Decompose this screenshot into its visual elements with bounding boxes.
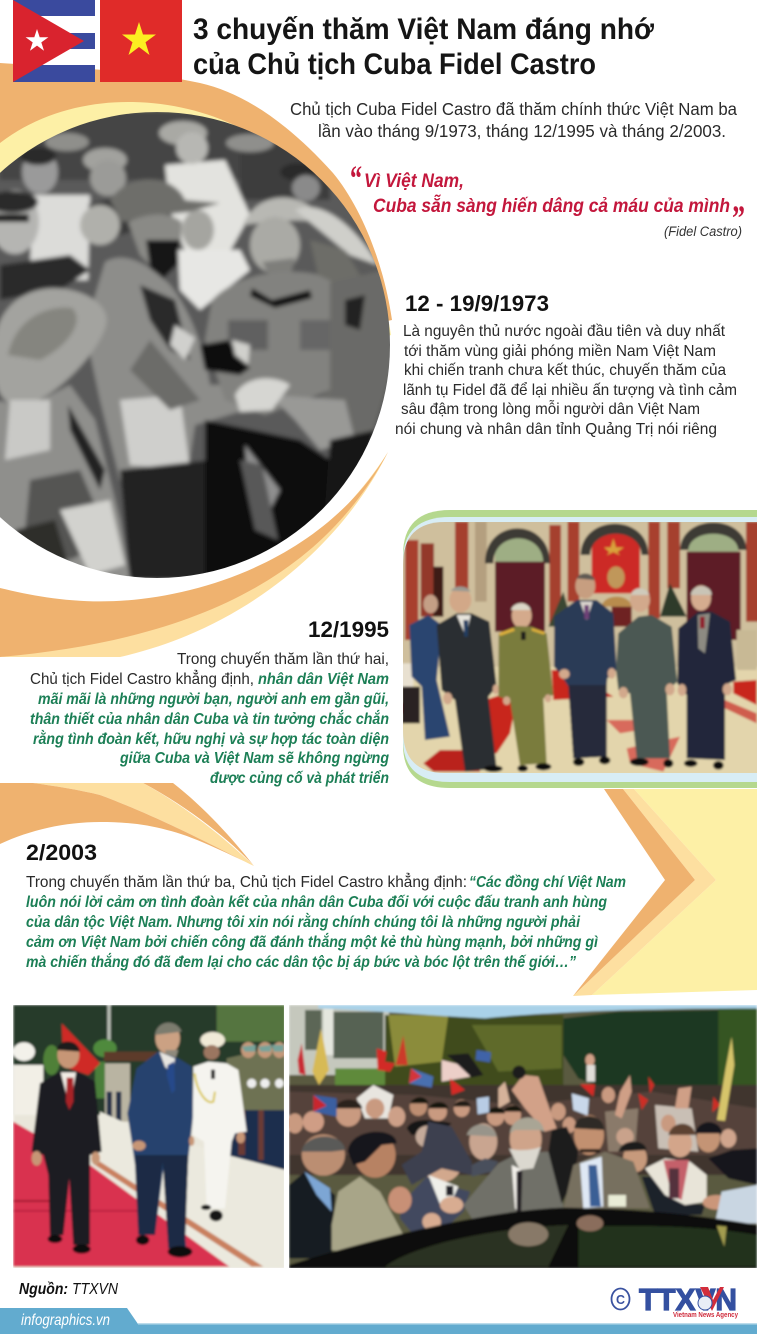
man: far left dark suit [302,1134,345,1176]
text block: 2003 visit: của dân tộc Việt Nam. Nhưng tôi xin nói rằng chính chúng tôi là những người phải [26,912,580,931]
text block: 2003 visit: mà chiến thắng đó đã đem lại cho các dân tộc bị áp bức và bóc lột trên thế giới…” [26,952,576,971]
front helmet [0,288,107,406]
plant [660,583,687,617]
text block: 2003 visit: cảm ơn Việt Nam bởi chiến công đã đánh thắng một kẻ thù hùng mạnh, bởi những gì [26,932,598,951]
red carpet and floor [400,667,757,777]
decorative swoosh: middle orange and yellow curves [0,783,254,866]
man: grey suit white hair [421,1141,462,1182]
text block: 1973 visit: sâu đậm trong lòng mỗi người dân Việt Nam [401,399,700,418]
man glasses left [0,190,39,254]
text block: 1973 visit: tới thăm vùng giải phóng miền Nam Việt Nam [404,343,716,360]
raised hands [512,1075,557,1132]
title: 3 chuyến thăm Việt Nam đáng nhớ [193,13,655,46]
clasped hands [235,378,290,412]
heading: 12/1995: 12/1995 [308,617,389,642]
heading: 12 - 19/9/1973: 12 - 19/9/1973 [405,291,549,316]
footer band [0,1308,757,1334]
icon: copyright: C [616,1292,626,1307]
white shirts [357,1085,393,1118]
intro text: Chủ tịch Cuba Fidel Castro đã thăm chính thức Việt Nam ba [290,99,737,119]
photo: Fidel Castro with soldiers in 1973 [0,110,400,580]
man 5 grey green [630,594,652,612]
flag [62,1023,100,1075]
text block: 1973 visit: khi chiến tranh chưa kết thúc, chuyến thăm của [404,362,726,379]
text block: 2003 visit: Trong chuyến thăm lần thứ ba, Chủ tịch Fidel Castro khẳng định: [26,872,467,891]
man: beige jacket [354,1132,396,1178]
text block: 1995 visit: rằng tình đoàn kết, hữu nghị và sự hợp tác toàn diện [33,729,389,748]
title: của Chủ tịch Cuba Fidel Castro [193,48,596,81]
right soldier helmet and face [243,198,318,225]
columns [405,540,418,640]
decorative chevron: yellow, light orange and orange arrow [573,789,757,996]
icon: globe and red swoosh [698,1287,724,1311]
text block: 1995 visit: giữa Cuba và Việt Nam sẽ không ngừng [119,750,389,767]
Castro cap and head [110,179,220,222]
crowd base [289,1085,757,1175]
agency name: Vietnam News Agency [673,1310,739,1319]
heading: 2/2003: 2/2003 [26,840,97,865]
intro text: lần vào tháng 9/1973, tháng 12/1995 và tháng 2/2003. [318,121,726,141]
text block: 1995 visit: mãi mãi là những người bạn, người anh em gần gũi, [38,691,389,708]
car roof [289,1208,757,1268]
dark hair [335,1100,362,1108]
white jacket man [645,1158,707,1205]
wordmark: TTXVN [639,1282,737,1317]
source credit: Nguồn: TTXVN [19,1281,118,1298]
text block: 1973 visit: lãnh tụ Fidel đã để lại nhiều ấn tượng và tình cảm [403,381,737,399]
man 2 dark suit [449,587,471,613]
man: right of Castro [563,1152,650,1208]
title [193,13,655,81]
far right hat and soldier [295,207,378,265]
photo frame: green and light blue border [395,510,757,788]
man behind Castro [182,210,214,250]
bust [607,566,625,588]
text block: 1973 visit: Là nguyên thủ nước ngoài đầu tiên và duy nhất [403,323,726,340]
photo: Castro waving to the crowd [287,1005,757,1268]
decorative swoosh: lower orange and yellow curves [0,452,388,657]
intro text [290,99,737,141]
text block: 1973 visit [395,323,737,438]
text block: 1973 visit: nói chung và nhân dân tỉnh Quảng Trị nói riêng [395,421,717,438]
man in black suit [57,1042,79,1068]
text block: 2003 visit: luôn nói lời cảm ơn tình đoàn kết của nhân dân Cuba đối với cuộc đấu tranh anh hùng [26,894,607,911]
dark gloved arm [200,340,250,375]
trees [385,1015,563,1085]
white uniform officer [200,1032,225,1048]
faces [336,1100,361,1127]
text block: 1995 visit: thân thiết của nhân dân Cuba và tin tưởng chắc chắn [30,709,389,728]
line of soldiers mid [105,1063,130,1122]
Fidel Castro [463,1152,565,1223]
quote: Vì Việt Nam, [364,171,464,192]
red carpet [13,1122,229,1267]
man: grey white-haired near left [472,1158,498,1177]
crowd behind [45,133,89,151]
right soldiers [227,1045,285,1110]
dark suit right [642,1177,705,1215]
arches and doors [494,537,544,563]
photo: Castro walking on the red carpet [13,1005,286,1268]
sky strip [318,1005,757,1018]
text block: 2003 visit: “Các đồng chí Việt Nam [469,874,626,891]
text block: 1995 visit [30,651,389,787]
text block: 1995 visit: Trong chuyến thăm lần thứ hai, [177,651,389,668]
building [289,1005,389,1075]
quote: ” [732,198,745,238]
text block: 1995 visit: nhân dân Việt Nam [258,671,389,688]
flags [313,1095,337,1117]
quote: Cuba sẵn sàng hiến dâng cả máu của mình [373,194,730,217]
right soldier body [205,272,335,415]
icon: flag of Cuba [13,0,95,82]
ground [98,1110,266,1164]
photo: leaders at the Presidential Palace 1995 [400,520,757,777]
shoes [517,765,528,772]
text block: 2003 visit [26,872,626,971]
quote: “ [350,158,362,198]
decorative arc: yellow ring around the circle photo [0,102,391,400]
quote: (Fidel Castro) [664,224,742,239]
man 3 khaki [512,603,532,628]
logo: TTXVN Vietnam News Agency [612,1282,739,1319]
man 6 navy [691,585,711,611]
text block: 1995 visit: Chủ tịch Fidel Castro khẳng định, [30,669,254,688]
text block: 1995 visit: được củng cố và phát triển [210,769,389,787]
hands [559,669,570,679]
decorative arc: orange behind the circle photo [0,63,392,340]
camera man [708,1148,757,1185]
camera [512,1066,526,1079]
quote [350,158,745,239]
front soldier back [0,385,130,580]
man 4 Fidel Castro [575,573,595,599]
website label: infographics.vn [21,1312,110,1329]
Castro body [85,258,245,490]
lower dark trousers [120,460,215,580]
icon: flag of Vietnam [100,0,182,82]
left white guards [13,1042,35,1061]
man 1 blue suit [423,595,438,613]
Fidel Castro [155,1023,180,1054]
